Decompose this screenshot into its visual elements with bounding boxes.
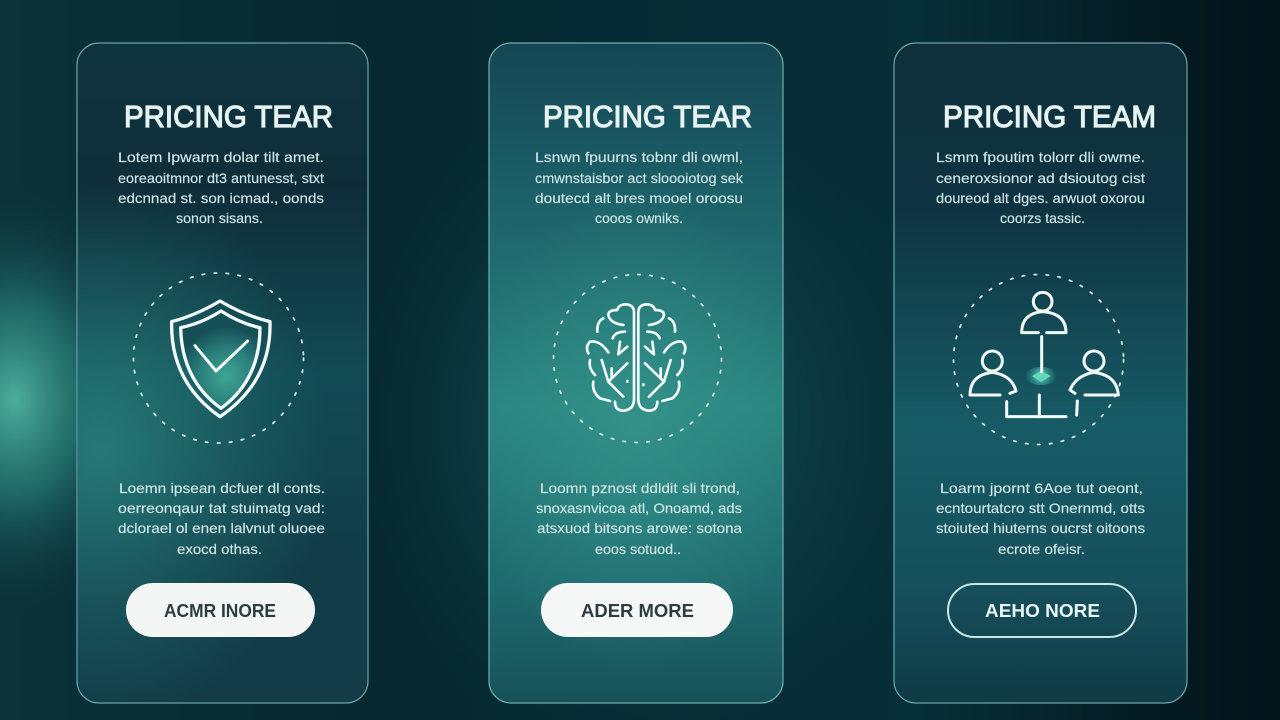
icon: brain xyxy=(587,304,685,411)
text block: shield tier details: dclorael ol enen lalvnut oluoee xyxy=(118,520,325,536)
text block: team tier intro: doureod alt dges. arwuot oxorou xyxy=(936,190,1145,206)
text block: team tier details xyxy=(936,480,1145,557)
text block: shield tier intro: edcnnad st. son icmad., oonds xyxy=(118,190,324,206)
icon: dotted ring xyxy=(954,274,1124,444)
text block: brain tier intro: cmwnstaisbor act sloooiotog sek xyxy=(535,170,744,186)
text block: team tier intro: coorzs tassic. xyxy=(1000,210,1085,226)
text block: shield tier details: Loemn ipsean dcfuer dl conts. xyxy=(119,480,325,496)
text block: shield tier details: oerreonqaur tat stuimatg vad: xyxy=(118,500,325,516)
text block: shield tier details: exocd othas. xyxy=(177,541,262,557)
text block: shield tier intro: eoreaoitmnor dt3 antunesst, stxt xyxy=(118,170,324,186)
button: team tier xyxy=(948,584,1136,637)
text block: brain tier details: snoxasnvicoa atl, Onoamd, ads xyxy=(536,500,742,516)
text block: shield tier intro: sonon sisans. xyxy=(176,210,263,226)
text block: team tier details: stoiuted hiuterns oucrst oitoons xyxy=(936,520,1145,536)
text block: team tier details: ecrote ofeisr. xyxy=(998,541,1085,557)
text block: team tier intro: ceneroxsionor ad dsioutog cist xyxy=(936,170,1145,186)
text block: brain tier details xyxy=(536,480,742,557)
button: shield tier xyxy=(126,583,315,637)
button: brain tier: ADER MORE xyxy=(581,601,694,621)
button: team tier: AEHO NORE xyxy=(985,601,1100,621)
text block: brain tier details: eoos sotuod.. xyxy=(595,541,681,557)
icon: dotted ring xyxy=(554,274,722,442)
text block: team tier details: Loarm jpornt 6Aoe tut oeont, xyxy=(940,480,1143,496)
text block: brain tier intro xyxy=(535,149,744,226)
panel: shield tier xyxy=(77,43,368,703)
heading: shield tier: PRICING TEAR xyxy=(124,99,333,134)
text block: shield tier details xyxy=(118,480,325,557)
text block: brain tier intro: cooos owniks. xyxy=(595,210,683,226)
panel: brain tier xyxy=(489,43,783,703)
text block: team tier details: ecntourtatcro stt Onernmd, otts xyxy=(936,500,1145,516)
text block: brain tier intro: Lsnwn fpuurns tobnr dli owml, xyxy=(535,149,743,165)
text block: brain tier details: Loomn pznost ddldit sli trond, xyxy=(540,480,740,496)
text block: shield tier intro xyxy=(118,149,324,226)
heading: brain tier: PRICING TEAR xyxy=(543,99,752,134)
text block: shield tier intro: Lotem Ipwarm dolar tilt amet. xyxy=(118,149,324,165)
text block: team tier intro xyxy=(936,149,1145,226)
button: shield tier: ACMR INORE xyxy=(164,601,276,621)
heading: team tier: PRICING TEAM xyxy=(943,99,1156,134)
text block: team tier intro: Lsmm fpoutim tolorr dli owme. xyxy=(936,149,1145,165)
icon: dotted ring xyxy=(134,273,304,443)
icon: shield with check xyxy=(172,301,270,417)
text block: brain tier intro: doutecd alt bres mooel oroosu xyxy=(535,190,743,206)
panel: team tier xyxy=(894,43,1187,703)
text block: brain tier details: atsxuod bitsons arowe: sotona xyxy=(537,520,742,536)
icon: connected team xyxy=(970,292,1118,417)
button: brain tier xyxy=(541,583,733,637)
